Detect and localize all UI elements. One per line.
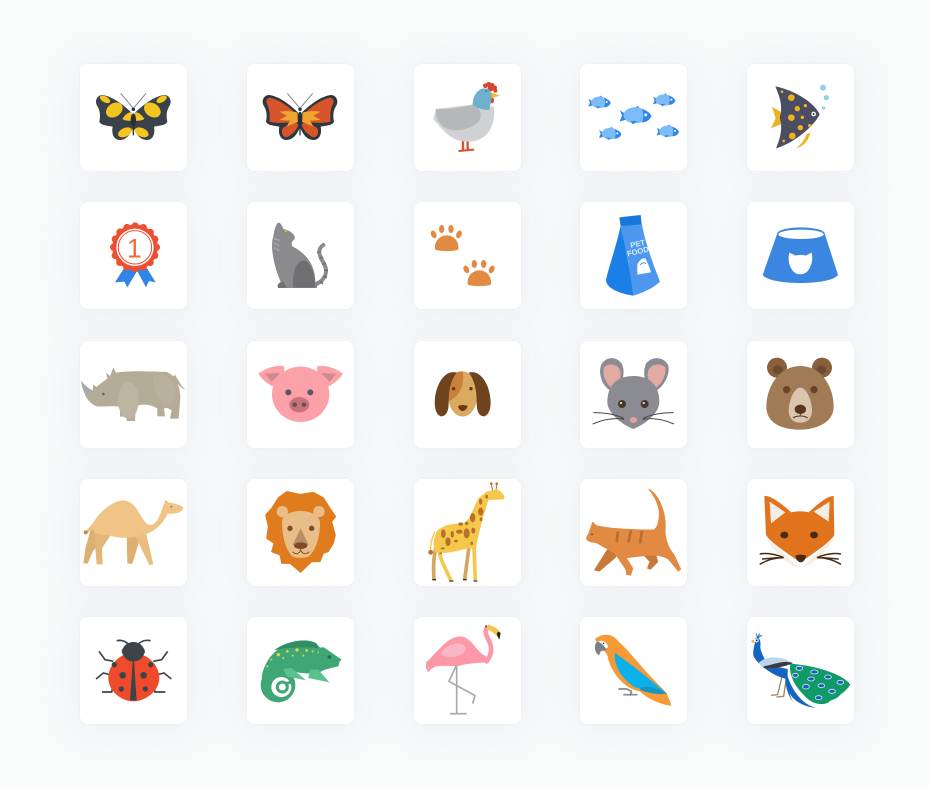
tile: pig xyxy=(247,341,354,448)
tile: award ribbon xyxy=(80,202,186,308)
tile: paw prints xyxy=(414,202,520,308)
tile: angelfish xyxy=(747,64,854,170)
tile: orange butterfly xyxy=(247,64,354,170)
tile: lion xyxy=(247,479,354,586)
tile: macaw xyxy=(580,617,686,724)
tile: camel xyxy=(80,479,186,586)
tile: sitting cat xyxy=(247,202,354,308)
tile: fox xyxy=(747,479,854,586)
tile: pet bowl xyxy=(747,202,854,308)
tile: rhinoceros xyxy=(80,341,186,448)
fish: small lower right xyxy=(657,125,679,138)
tile: flamingo xyxy=(414,617,520,724)
fish: small top right xyxy=(653,93,675,106)
tile: chameleon xyxy=(247,617,354,724)
tile: award ribbon: 1 xyxy=(127,233,142,263)
fish: small top left xyxy=(588,96,611,109)
tile: ladybird xyxy=(80,617,186,724)
tile: school of fish xyxy=(580,64,686,170)
tile: hen xyxy=(414,64,520,170)
tile: pet food bag: PET xyxy=(629,238,646,250)
tile: dog xyxy=(414,341,520,448)
tile: walking cat xyxy=(580,479,686,586)
fish: large centre xyxy=(620,106,651,124)
tile: mouse xyxy=(580,341,686,448)
tile: yellow butterfly xyxy=(80,64,186,170)
tile: pet food bag xyxy=(580,202,686,308)
tile: giraffe xyxy=(414,479,520,586)
tile: peacock xyxy=(747,617,854,724)
fish: small lower left xyxy=(599,127,621,140)
tile: bear xyxy=(747,341,854,448)
tile: pet food bag: FOOD xyxy=(626,245,650,258)
